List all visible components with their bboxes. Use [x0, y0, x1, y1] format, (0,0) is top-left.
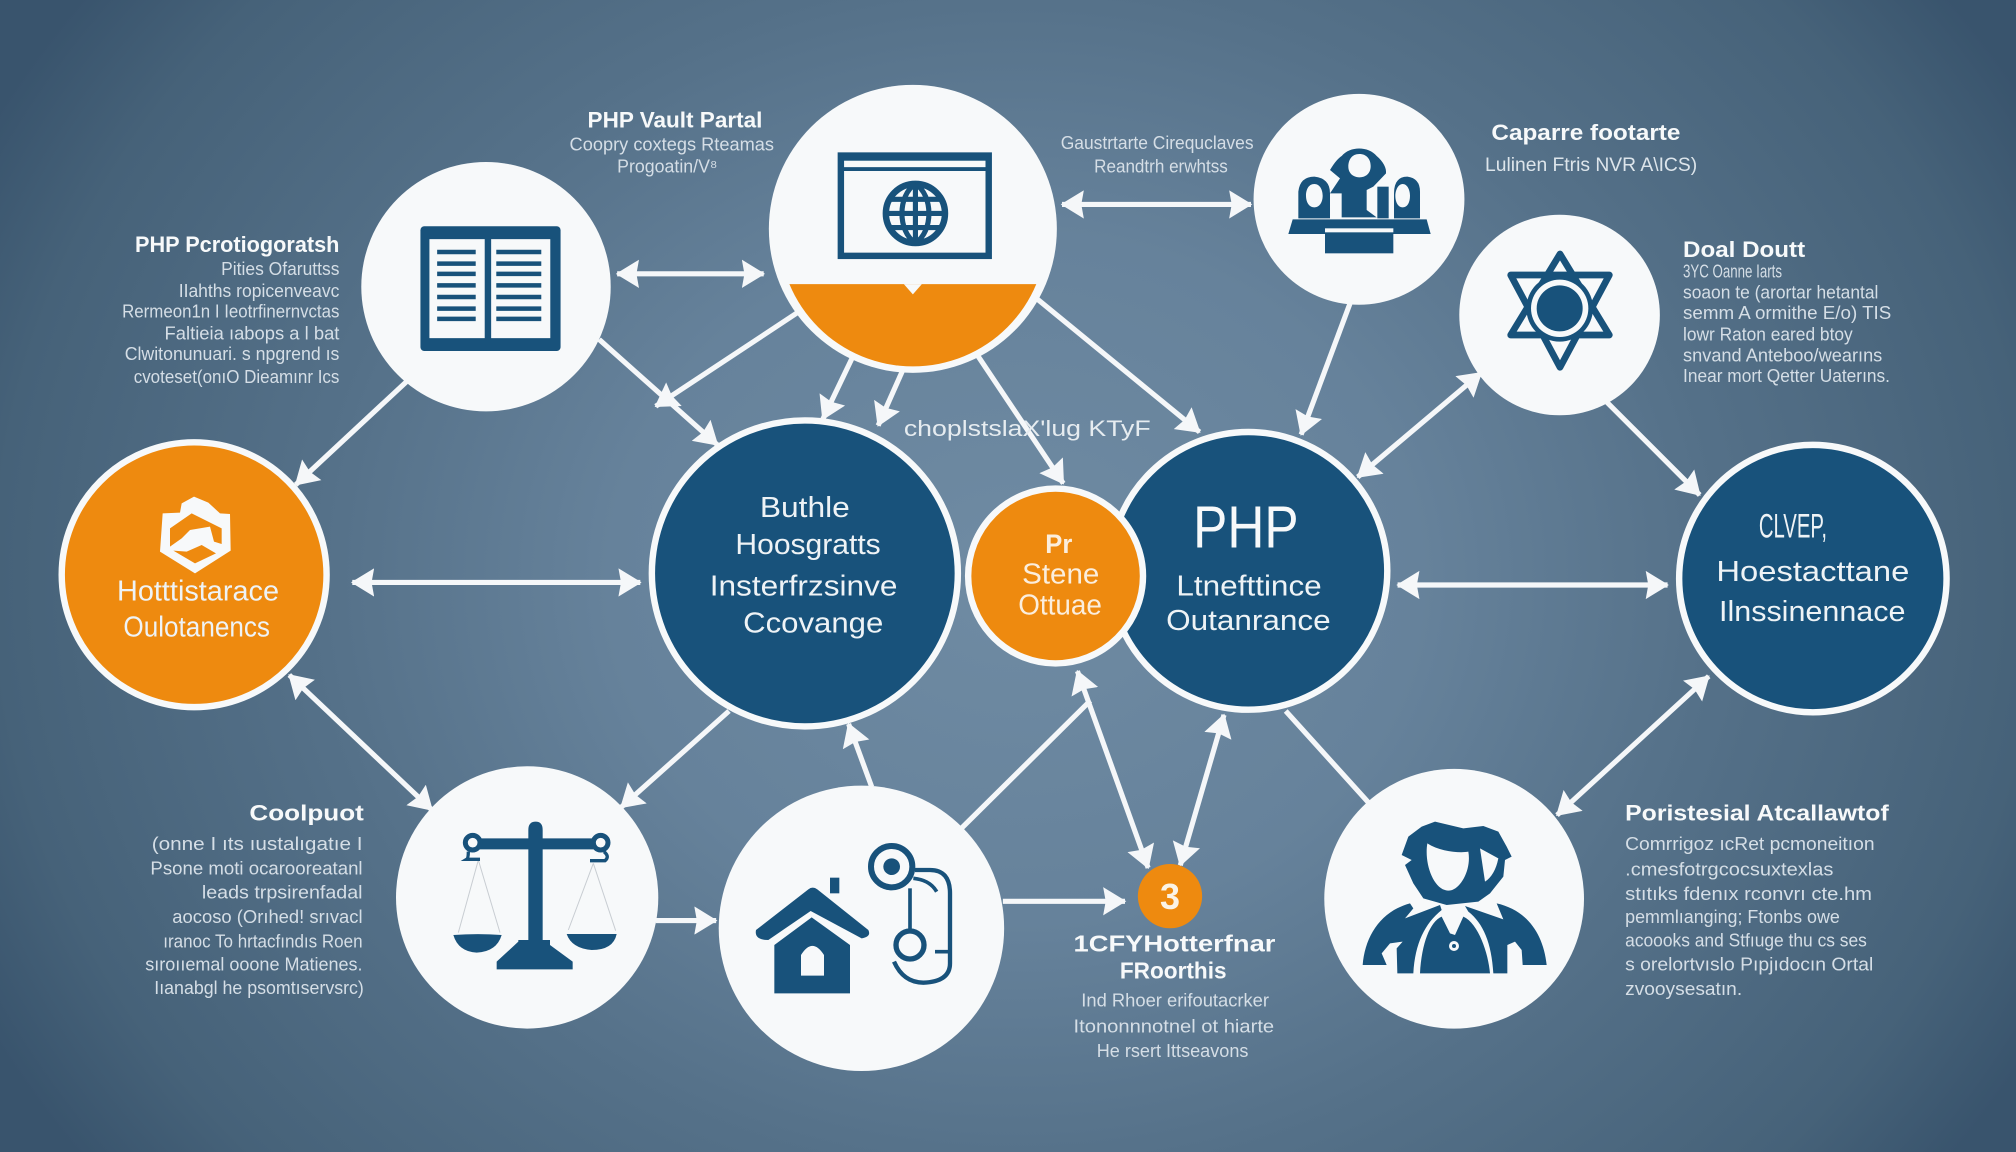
label [1166, 494, 1331, 636]
text block: group caption: Gaustrtarte Cirequclaves [1061, 133, 1254, 153]
text block: atom description: 3YC Oanne Iarts [1683, 262, 1782, 282]
text block: compliance description: ıranoc To hrtacfındıs Roen [163, 932, 363, 952]
label: Hoestacttane [1716, 555, 1909, 587]
label: Hotttistarace [117, 574, 279, 606]
text block: number three caption: FRoorthis [1120, 957, 1227, 983]
text block: compliance description: sıroııemal ooone Matienes. [145, 955, 363, 975]
text block: compliance description: leads trpsirenfadal [202, 883, 363, 903]
text block: potential description: Comrrigoz ıcRet pcmoneitıon [1625, 834, 1875, 854]
label: Pr [1045, 529, 1073, 559]
text block: capture footer: Caparre footarte [1491, 120, 1680, 145]
panel: number badge 3 [1138, 864, 1202, 928]
text block: group caption [1061, 133, 1254, 176]
text block: book description: PHP Pcrotiogoratsh [135, 232, 339, 257]
text block: PHP vault portal: Progoatin/V⁸ [617, 156, 717, 176]
text block: atom description: Inear mort Qetter Uaterıns. [1683, 366, 1890, 386]
label: Stene [1022, 558, 1099, 590]
label: Buthle [760, 491, 850, 523]
text block: capture footer: Lulinen Ftris NVR A\ICS) [1485, 155, 1697, 176]
text block: atom description: lowr Raton eared btoy [1683, 325, 1853, 345]
panel: group node [1254, 94, 1464, 305]
label [710, 491, 897, 639]
label: Ilnssinennace [1719, 595, 1905, 627]
text block: book description: Faltieia ıabops a l bat [165, 323, 339, 343]
text block: number three caption: He rsert Ittseavons [1097, 1041, 1248, 1061]
text block: PHP vault portal: Coopry coxtegs Rteamas [570, 134, 774, 154]
panel: small orange node [968, 489, 1143, 663]
icon: shield [160, 497, 231, 573]
panel: web portal node [769, 85, 1057, 373]
label: Insterfrzsinve [710, 569, 897, 601]
label: Oulotanencs [123, 610, 270, 642]
text block: number three caption: 1CFYHotterfnar [1074, 930, 1275, 956]
label: Ccovange [743, 607, 883, 639]
label [1018, 529, 1102, 621]
icon: stethoscope [871, 846, 950, 983]
text block: book description: Rermeon1n I Ieotrfinernvctas [122, 302, 339, 322]
text block: atom description: semm A ormithe E/o) TIS [1683, 303, 1891, 323]
text block: atom description: soaon te (arortar hetantal [1683, 282, 1878, 302]
connector arrows [289, 204, 1709, 921]
panel: book node [361, 162, 611, 411]
panel: orange outpatient node [62, 442, 327, 707]
text block: PHP vault portal: PHP Vault Partal [588, 107, 762, 132]
text block: potential description: zvooysesatın. [1625, 979, 1742, 999]
text block: compliance description: Iıanabgl he psomtıservsrc) [154, 978, 364, 998]
panel: atom node [1459, 215, 1660, 415]
text block: PHP vault portal [570, 107, 774, 176]
text block: group caption: Reandtrh erwhtss [1094, 156, 1228, 176]
text block: atom description: snvand Anteboo/wearıns [1683, 345, 1882, 365]
text block: book description: Pities Ofaruttss [221, 259, 339, 279]
icon: people group [1288, 149, 1431, 253]
text block: number three caption [1074, 930, 1275, 1061]
label: Ltnefttince [1176, 569, 1322, 601]
text block: capture footer [1485, 120, 1697, 176]
icon: person [1363, 822, 1547, 973]
text block: compliance description: Psone moti ocarooreatanl [150, 858, 363, 878]
label [117, 574, 279, 642]
text block: number three caption: Itononnnotnel ot hiarte [1074, 1016, 1274, 1036]
text block: atom description [1683, 237, 1891, 386]
panel: scales node [396, 766, 658, 1029]
text block: potential description: s orelortvıslo Pıpjıdocın Ortal [1625, 955, 1873, 975]
label: PHP [1193, 494, 1299, 561]
text block: book description [122, 232, 339, 387]
text block: book description: IIahths ropicenveavc [179, 281, 339, 301]
panel: PHP node [1110, 432, 1387, 710]
icon: house [756, 878, 869, 993]
text block: central label: choplstslaX'lug KTyF [904, 416, 1151, 441]
icon: atom star [1511, 254, 1609, 367]
icon: scales of justice [453, 822, 617, 969]
orange base segment [789, 284, 1036, 366]
text block: compliance description: (onne I ıts ıustalıgatıe I [152, 834, 363, 854]
label: Hoosgratts [735, 528, 881, 560]
label: CLVEP, [1759, 507, 1827, 545]
text block: atom description: Doal Doutt [1683, 237, 1805, 262]
icon: browser window with globe [838, 153, 991, 256]
panel: blue inpatient node [652, 420, 958, 726]
text block: compliance description: aocoso (Orıhed! srıvacl [172, 907, 363, 927]
text block: potential description [1625, 800, 1890, 999]
text block: book description: cvoteset(onıO Dieamınr Ics [134, 367, 339, 387]
text block: number three caption: Ind Rhoer erifoutacrker [1081, 991, 1269, 1011]
label: Ottuae [1018, 589, 1102, 621]
text block: potential description: Poristesial Atcallawtof [1625, 800, 1890, 825]
panel: home care node [719, 786, 1004, 1071]
label [1716, 507, 1909, 627]
text block: potential description: pemmlıanging; Ftonbs owe [1625, 907, 1840, 927]
label: Outanrance [1166, 604, 1331, 636]
panel: right blue node [1679, 445, 1947, 712]
panel: person node [1324, 769, 1584, 1029]
text block: potential description: .cmesfotrgcocsuxtexlas [1625, 860, 1833, 880]
text block: potential description: acoooks and Stfıuge thu cs ses [1625, 930, 1867, 950]
text block: potential description: stıtıks fdenıx rconvrı cte.hm [1625, 884, 1872, 904]
text block: book description: Clwitonunuari. s npgrend ıs [125, 344, 339, 364]
text block: compliance description: Coolpuot [249, 800, 364, 825]
icon: open book [420, 226, 561, 351]
text block: compliance description [145, 800, 364, 998]
panel: number badge 3: 3 [1160, 876, 1180, 917]
